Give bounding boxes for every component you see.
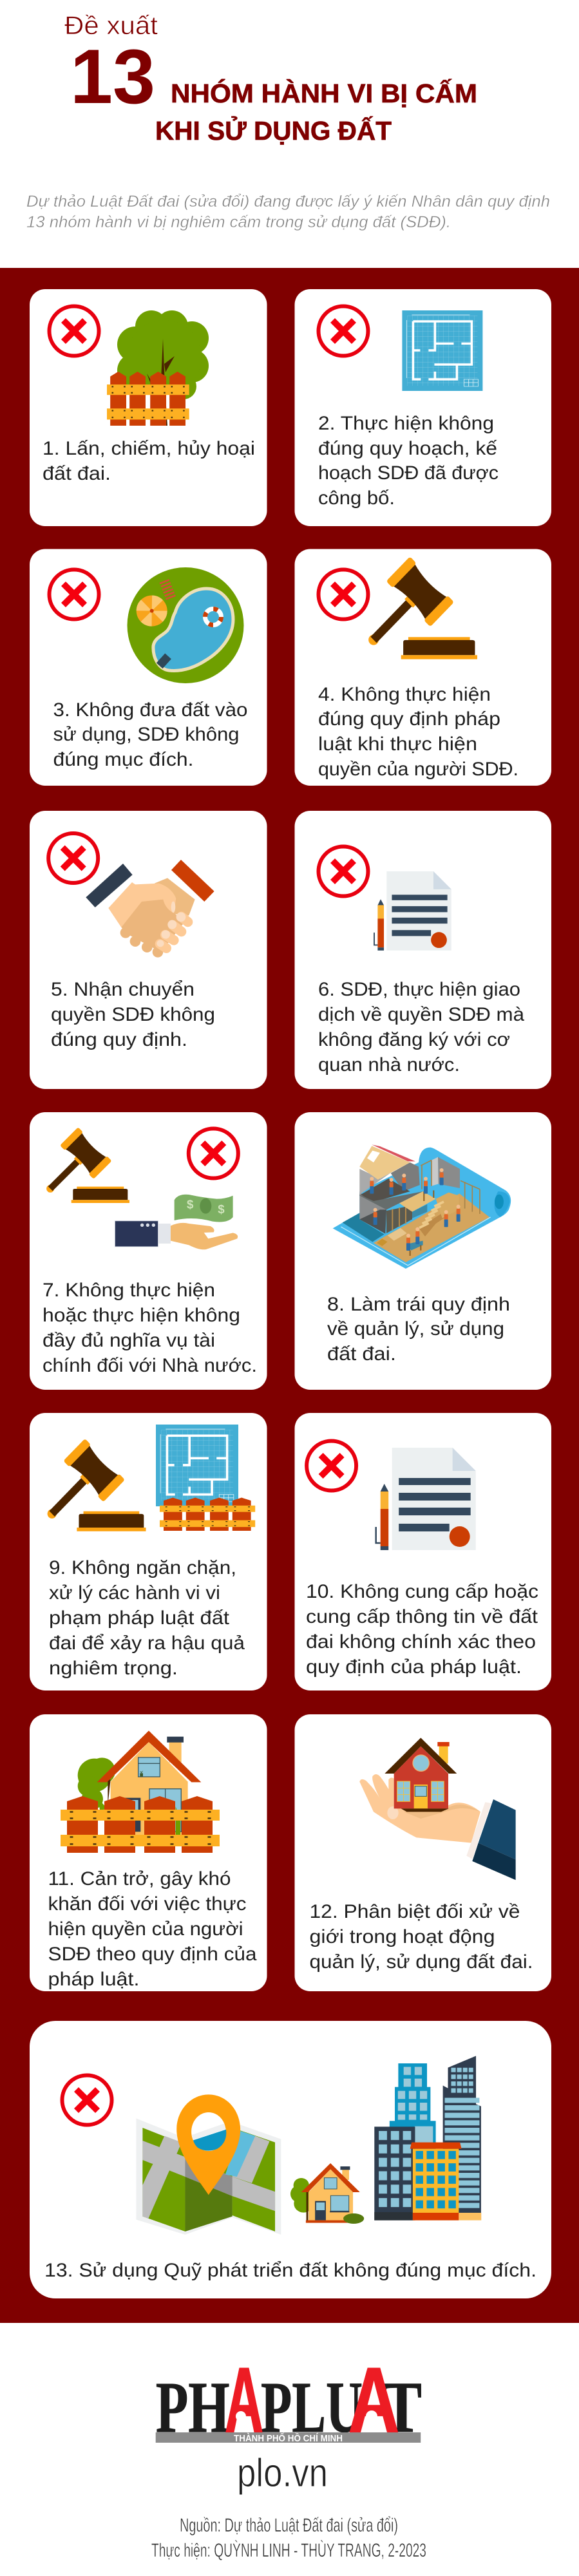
card 2 background [295,289,551,526]
panel: card 1 [30,289,267,526]
intro text [26,193,550,231]
logo: Pháp Luật: Á [225,2349,263,2452]
text: item 4: quyền của người SDĐ. [318,759,518,780]
text: item 10: đai không chính xác theo [306,1631,536,1653]
card 13 background [30,2021,551,2298]
text: item 6: quan nhà nước. [318,1054,460,1075]
headline line 1: NHÓM HÀNH VI BỊ CẤM [171,79,477,108]
text: item 7: hoặc thực hiện không [43,1305,240,1326]
text: item 11: 11. Cản trở, gây khó [48,1868,231,1889]
text: item 10: quy định của pháp luật. [306,1656,522,1678]
card 12 background [295,1714,551,1991]
text: item 8: về quản lý, sử dụng [327,1318,504,1340]
text: item 2: công bố. [318,488,395,509]
panel: card 7 [30,1112,267,1390]
source credits: Thực hiện: QUỲNH LINH - THÙY TRANG, 2-2023 [151,2540,426,2561]
text: item 12: 12. Phân biệt đối xử về [309,1901,520,1922]
logo: Pháp Luật [156,2367,421,2443]
panel: card 2 [295,289,551,526]
icon: small house [290,2163,364,2224]
panel: card 11 [30,1714,267,1991]
text: item 8: đất đai. [327,1343,396,1365]
text: item 9 [49,1557,245,1679]
icon: tree behind fence [107,310,209,426]
panel: card 10 [295,1413,551,1690]
text: item 11 [48,1868,257,1990]
panel: card 4 [295,549,551,786]
text: item 8 [327,1294,510,1365]
text: item 12: giới trong hoạt động [309,1926,495,1947]
website: plo.vn [237,2451,328,2496]
text: item 8: 8. Làm trái quy định [327,1294,510,1315]
icon: city buildings [374,2056,481,2221]
icon: house under construction on blueprint [333,1144,511,1269]
icon: prohibited sign 2 [318,307,368,355]
logo: Pháp Luật: T [382,2367,422,2448]
text: item 9: 9. Không ngăn chặn, [49,1557,236,1578]
text: item 9: xử lý các hành vi vi [49,1582,220,1604]
icon: document and pen [374,871,451,951]
text: item 11: SDĐ theo quy định của [48,1944,257,1965]
panel: card 6 [295,811,551,1089]
icon: gavel [29,1439,146,1538]
logo: Pháp Luật: Ậ [348,2349,399,2452]
icon: folded map with pin [136,2094,281,2235]
text: item 7 [43,1280,257,1376]
card 5 background [30,811,267,1089]
text: item 6: không đăng ký với cơ [318,1029,510,1050]
panel: card 5 [30,811,267,1089]
text: item 4: 4. Không thực hiện [318,684,491,705]
text: item 12 [309,1901,533,1973]
text: item 2: hoạch SDĐ đã được [318,462,498,484]
text: item 5: 5. Nhận chuyển [51,979,195,1000]
text: item 7: đầy đủ nghĩa vụ tài [43,1330,215,1351]
icon: prohibited sign 5 [48,833,98,883]
text: item 13: 13. Sử dụng Quỹ phát triển đất không đúng mục đích. [44,2260,536,2281]
logo: Pháp Luật: PLU [261,2367,363,2448]
card 6 background [295,811,551,1089]
panel: card 3 [30,549,267,786]
text: item 4 [318,684,518,780]
card 4 background [295,549,551,786]
text: item 1 [43,438,255,484]
title kicker: Đề xuất [64,12,158,40]
text: item 2 [318,413,498,509]
big number 13: 13 [70,33,155,120]
text: item 7: chính đối với Nhà nước. [43,1355,257,1376]
logo: Pháp Luật: PH [156,2367,230,2448]
icon: prohibited sign 4 [318,569,368,620]
panel: dark red background [0,268,579,2323]
text: item 11: pháp luật. [48,1969,139,1990]
text: item 10: 10. Không cung cấp hoặc [306,1581,538,1602]
card 8 background [295,1112,551,1390]
headline line 2: KHI SỬ DỤNG ĐẤT [155,116,392,146]
text: item 10 [306,1581,538,1678]
card 7 background [30,1112,267,1390]
icon: gavel [31,1127,129,1208]
icon: hand receiving money [115,1195,238,1249]
text: item 3: sử dụng, SDĐ không [53,724,240,745]
intro text: Dự thảo Luật Đất đai (sửa đổi) đang được lấy ý kiến Nhân dân quy định [26,193,550,211]
icon: gavel [348,556,477,667]
icon: handshake [86,860,214,958]
icon: prohibited sign 6 [318,846,368,896]
icon: prohibited sign 7 [189,1128,238,1179]
icon: blueprint and fence [156,1425,255,1531]
text: item 3: 3. Không đưa đất vào [53,699,247,721]
icon: hand holding house [359,1738,516,1880]
text: item 11: hiện quyền của người [48,1918,243,1940]
text: item 3: đúng mục đích. [53,749,193,770]
icon: floor plan blueprint [402,310,482,391]
text: item 2: 2. Thực hiện không [318,413,494,434]
panel: card 9 [29,1413,267,1690]
text: item 12: quản lý, sử dụng đất đai. [309,1951,533,1973]
text: item 9: phạm pháp luật đất [49,1607,230,1629]
text: item 9: nghiêm trọng. [49,1658,178,1679]
panel: card 13 [30,2021,551,2298]
intro text: 13 nhóm hành vi bị nghiêm cấm trong sử dụng đất (SDĐ). [26,213,451,231]
text: item 6: dịch về quyền SDĐ mà [318,1004,524,1025]
icon: swimming pool [128,567,243,683]
icon: document and pen [376,1448,476,1550]
card 3 background [30,549,267,786]
icon: prohibited sign 1 [49,307,99,355]
source credits: Nguồn: Dự thảo Luật Đất đai (sửa đổi) [180,2515,398,2536]
text: item 1: 1. Lấn, chiếm, hủy hoại [43,438,255,459]
icon: hand receiving money: $ [218,1202,225,1216]
title [64,12,477,146]
text: item 4: đúng quy định pháp [318,708,500,730]
text: item 10: cung cấp thông tin về đất [306,1606,538,1627]
card 1 background [30,289,267,526]
icon: house behind fence [61,1730,220,1853]
text: item 2: đúng quy hoạch, kế [318,438,497,459]
text: item 6: 6. SDĐ, thực hiện giao [318,979,520,1000]
text: item 5: đúng quy định. [51,1029,187,1050]
icon: hand receiving money: $ [187,1198,194,1211]
card 11 background [30,1714,267,1991]
icon: prohibited sign 10 [307,1441,356,1490]
panel: card 12 [295,1714,551,1991]
card 9 background [30,1413,267,1690]
text: item 9: đai để xảy ra hậu quả [49,1633,245,1654]
source credits [151,2515,426,2561]
icon: prohibited sign 13 [62,2075,112,2125]
text: item 1: đất đai. [43,463,111,484]
text: item 3 [53,699,247,770]
logo: Pháp Luật: THÀNH PHỐ HỒ CHÍ MINH [234,2432,343,2444]
text: item 7: 7. Không thực hiện [43,1280,215,1301]
text: item 11: khăn đối với việc thực [48,1893,246,1915]
card 10 background [295,1413,551,1690]
panel: card 8 [295,1112,551,1390]
icon: prohibited sign 3 [49,569,99,620]
text: item 5 [51,979,215,1050]
text: item 4: luật khi thực hiện [318,734,477,755]
text: item 5: quyền SDĐ không [51,1004,215,1025]
text: item 6 [318,979,524,1075]
